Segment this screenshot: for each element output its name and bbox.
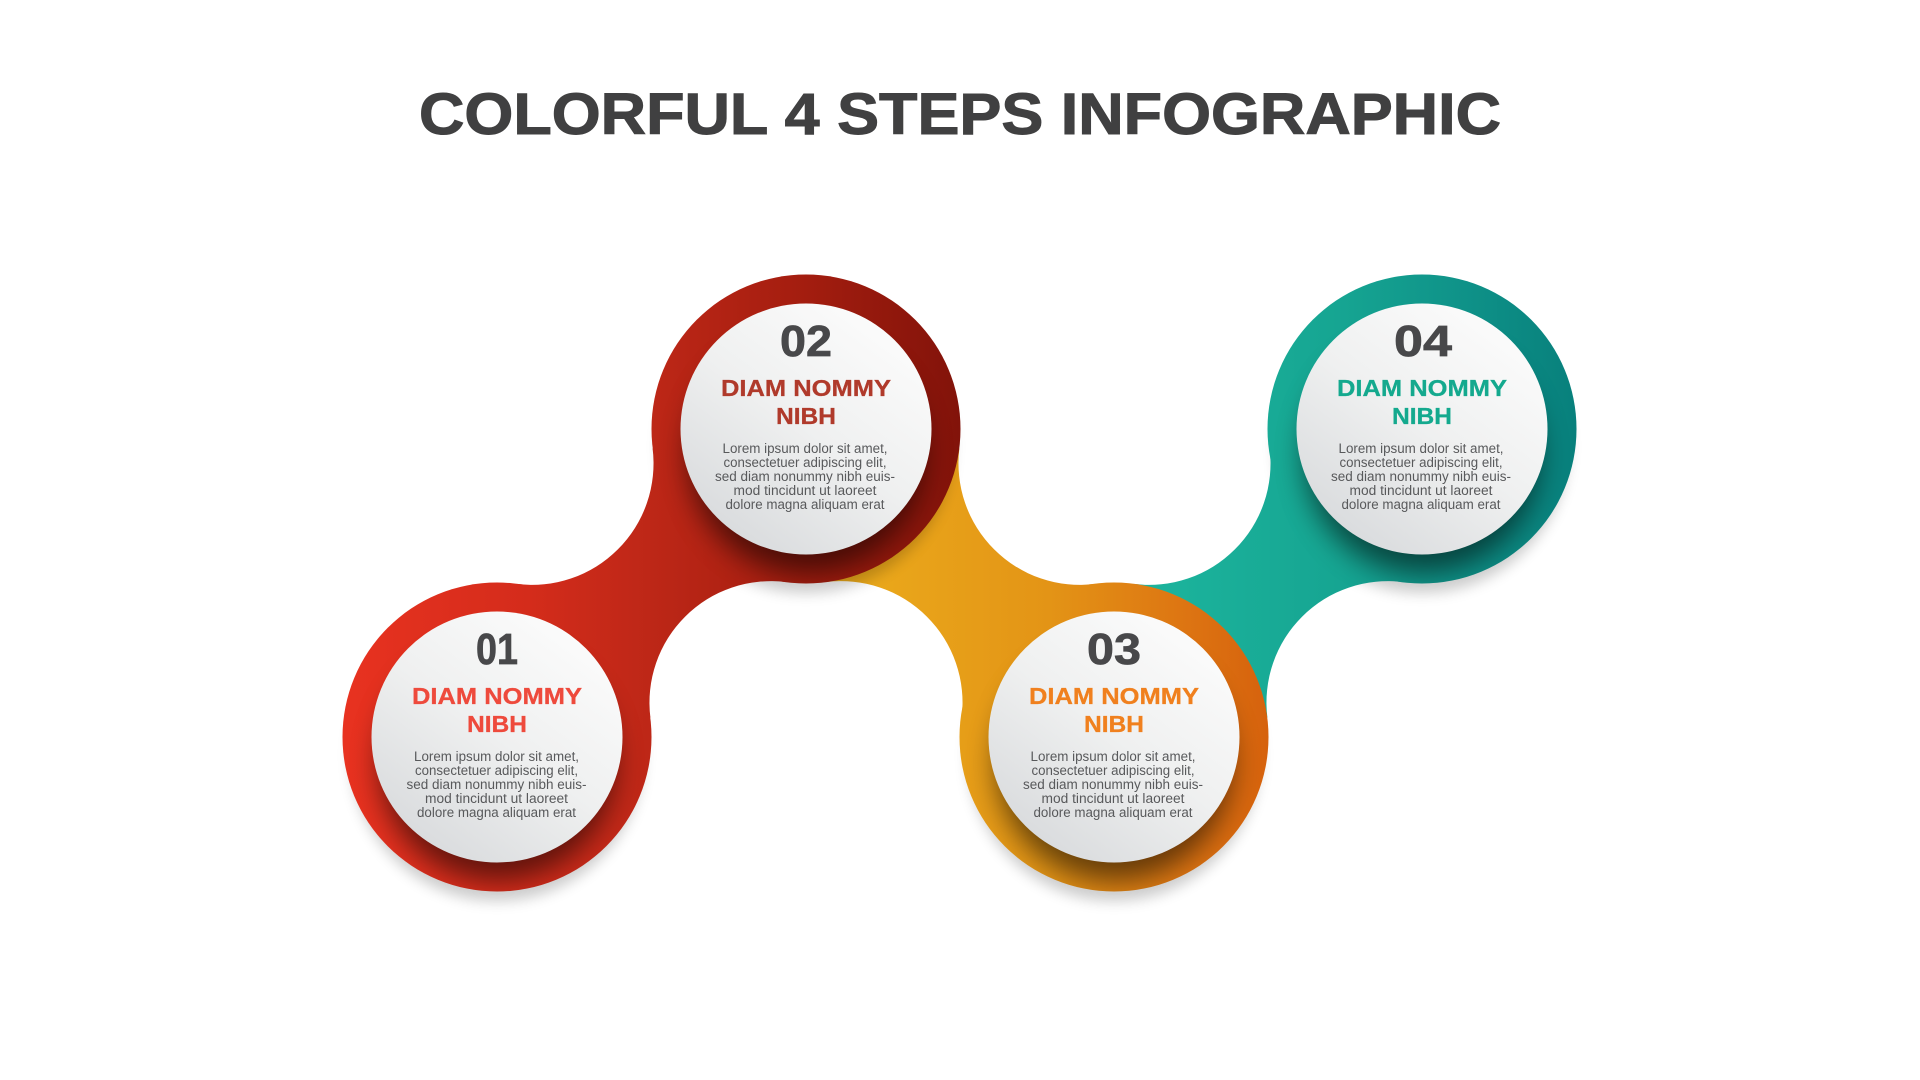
step 4 number: 04 — [1394, 317, 1453, 366]
step 4 heading: NIBH — [1392, 403, 1452, 429]
step 1 heading: DIAM NOMMY — [412, 683, 582, 709]
step 2 number: 02 — [780, 317, 832, 366]
step 2 body text: consectetuer adipiscing elit, — [724, 455, 886, 470]
step 3 body text: dolore magna aliquam erat — [1034, 805, 1193, 820]
step 1 body text: dolore magna aliquam erat — [417, 805, 576, 820]
step 1 body text: consectetuer adipiscing elit, — [415, 763, 578, 778]
step 1 body text — [406, 749, 586, 820]
step 2 heading: DIAM NOMMY — [721, 375, 891, 401]
step 3 card — [988, 612, 1240, 862]
step 3 body text: consectetuer adipiscing elit, — [1032, 763, 1194, 778]
step 2 body text: sed diam nonummy nibh euis- — [715, 469, 895, 484]
step 3 number: 03 — [1087, 625, 1141, 674]
step 2 panel — [517, 274, 960, 718]
step 3 heading: NIBH — [1084, 711, 1144, 737]
step 4 body text: mod tincidunt ut laoreet — [1350, 483, 1493, 498]
step 1 body text: sed diam nonummy nibh euis- — [406, 777, 586, 792]
step 3 ring and connector — [826, 448, 1268, 892]
step 4 body text: sed diam nonummy nibh euis- — [1331, 469, 1511, 484]
step 1 number: 01 — [476, 625, 518, 674]
step 1 body text: mod tincidunt ut laoreet — [425, 791, 568, 806]
step 4 body text — [1331, 441, 1511, 512]
step 2 ring and connector — [517, 274, 960, 718]
step 4 heading: DIAM NOMMY — [1337, 375, 1507, 401]
step 4 card — [1296, 304, 1548, 554]
step 3 heading: DIAM NOMMY — [1029, 683, 1199, 709]
step 2 heading: NIBH — [776, 403, 836, 429]
step 3 body text: mod tincidunt ut laoreet — [1042, 791, 1185, 806]
step 4 body text: dolore magna aliquam erat — [1342, 497, 1501, 512]
step 1 card — [372, 612, 622, 862]
step 2 body text: Lorem ipsum dolor sit amet, — [722, 441, 888, 456]
step 4 ring and connector — [1134, 274, 1576, 718]
step 4 body text: consectetuer adipiscing elit, — [1340, 455, 1502, 470]
step 4 body text: Lorem ipsum dolor sit amet, — [1338, 441, 1504, 456]
step 2 body text: mod tincidunt ut laoreet — [734, 483, 877, 498]
step 1 heading: NIBH — [467, 711, 527, 737]
step 2 body text — [715, 441, 895, 512]
step 3 panel — [826, 448, 1268, 901]
step 2 card — [680, 304, 932, 554]
step 1 soft shadow — [351, 609, 643, 901]
step 3 body text — [1023, 749, 1203, 820]
step 3 body text: sed diam nonummy nibh euis- — [1023, 777, 1203, 792]
title: COLORFUL 4 STEPS INFOGRAPHIC — [419, 82, 1501, 147]
step 1 panel — [342, 582, 652, 892]
step 4 panel — [1134, 274, 1576, 718]
step 1 ring — [342, 582, 652, 892]
step 2 body text: dolore magna aliquam erat — [726, 497, 885, 512]
step 3 body text: Lorem ipsum dolor sit amet, — [1030, 749, 1196, 764]
step 1 body text: Lorem ipsum dolor sit amet, — [414, 749, 579, 764]
